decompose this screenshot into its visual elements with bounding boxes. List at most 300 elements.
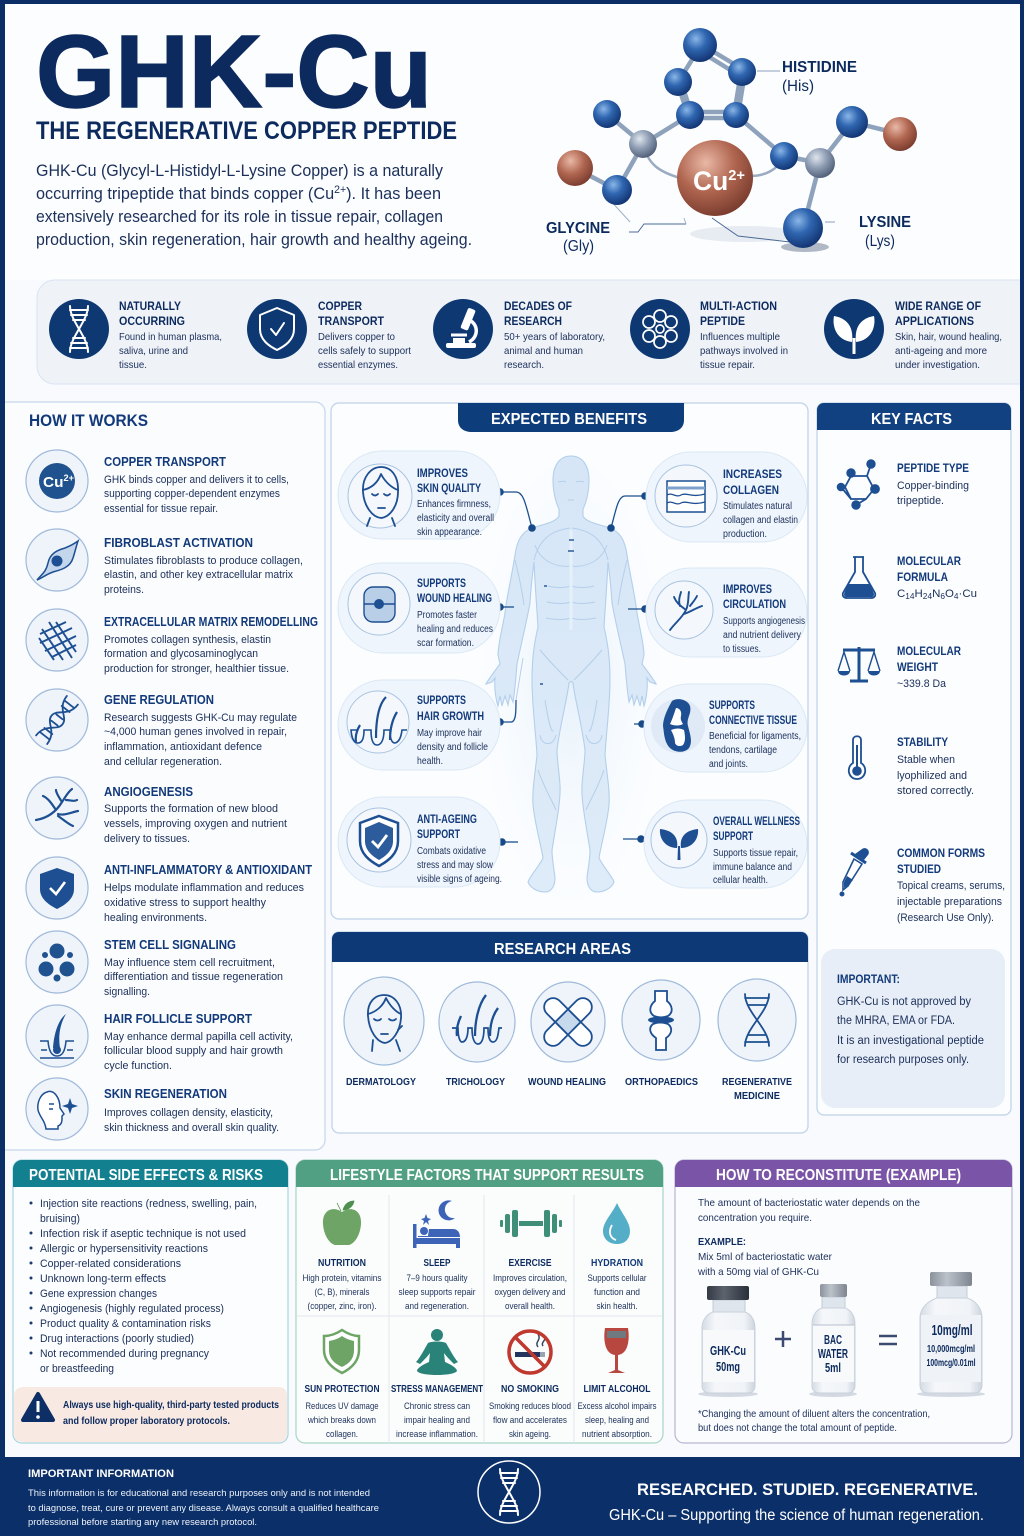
feature: wide range of applications: Skin, hair, wound healing, xyxy=(895,331,1002,343)
list: side effects: Not recommended during pregnancy xyxy=(40,1348,209,1360)
panel: feature band xyxy=(37,280,1024,384)
feature: multi-action peptide: pathways involved in xyxy=(700,345,788,357)
factor: sun protection: SUN PROTECTION xyxy=(304,1383,380,1395)
fact: stability xyxy=(849,735,974,797)
factor: sleep: sleep supports repair xyxy=(398,1287,476,1298)
benefit: improves skin quality: SKIN QUALITY xyxy=(417,483,481,495)
feature: multi-action peptide: tissue repair. xyxy=(700,359,755,371)
item: fibroblast activation: proteins. xyxy=(104,584,144,596)
vial: 10mg/ml result xyxy=(917,1272,985,1397)
item: stem cell signaling xyxy=(26,931,283,998)
area: trichology: TRICHOLOGY xyxy=(446,1076,505,1088)
fact: molecular formula: FORMULA xyxy=(897,570,948,584)
fact: common forms studied: injectable preparations xyxy=(897,896,1002,908)
feature: multi-action peptide xyxy=(630,299,788,371)
factor: stress management xyxy=(391,1329,483,1440)
feature: multi-action peptide: PEPTIDE xyxy=(700,314,745,328)
fact: molecular formula: O xyxy=(945,588,954,600)
factor: nutrition xyxy=(302,1201,382,1312)
feature: wide range of applications: APPLICATIONS xyxy=(895,314,974,328)
benefit: increases collagen: INCREASES xyxy=(723,469,782,481)
factor: no smoking: Smoking reduces blood xyxy=(489,1401,571,1412)
benefit: increases collagen xyxy=(646,452,807,542)
fact: molecular weight: MOLECULAR xyxy=(897,644,961,658)
item: extracellular matrix remodelling xyxy=(26,609,318,675)
feature: naturally occurring: tissue. xyxy=(119,359,147,371)
item: copper transport: COPPER TRANSPORT xyxy=(104,455,226,469)
benefit: supports wound healing: healing and reduces xyxy=(417,624,493,635)
item: angiogenesis xyxy=(26,777,287,845)
factor: nutrition: (C, B), minerals xyxy=(314,1287,370,1298)
footer: tagline xyxy=(609,1480,984,1524)
fact: common forms studied: COMMON FORMS xyxy=(897,846,985,860)
fact: molecular formula: ·Cu xyxy=(959,588,977,600)
benefit: supports hair growth xyxy=(338,680,500,770)
subtitle: THE REGENERATIVE COPPER PEPTIDE xyxy=(36,117,457,145)
item: hair follicle support: cycle function. xyxy=(104,1060,172,1072)
vial: GHK-Cu 50mg xyxy=(698,1286,758,1397)
benefit: supports hair growth: HAIR GROWTH xyxy=(417,711,484,723)
factor: exercise: oxygen delivery and xyxy=(494,1287,566,1298)
item: copper transport: 2+ xyxy=(63,473,74,483)
fact: molecular formula: 6 xyxy=(940,592,946,601)
item: anti-inflammatory and antioxidant: oxidative stress to support healthy xyxy=(104,897,267,909)
item: extracellular matrix remodelling: Promotes collagen synthesis, elastin xyxy=(104,634,271,646)
factor: no smoking: skin ageing. xyxy=(509,1429,551,1440)
benefit: supports wound healing: WOUND HEALING xyxy=(417,593,492,605)
footnote xyxy=(698,1409,930,1434)
instructions: with a 50mg vial of GHK-Cu xyxy=(697,1266,819,1278)
fact: molecular formula: 14 xyxy=(905,592,915,601)
item: extracellular matrix remodelling: EXTRACELLULAR MATRIX REMODELLING xyxy=(104,615,318,629)
feature: decades of research: animal and human xyxy=(504,345,583,357)
footer: important information: to diagnose, treat, cure or prevent any disease. Always consult a qualified healthcare xyxy=(28,1503,379,1514)
item: gene regulation xyxy=(26,689,297,768)
fact: molecular weight xyxy=(838,644,961,690)
item: gene regulation: inflammation, antioxidant defence xyxy=(104,741,262,753)
item: fibroblast activation: Stimulates fibroblasts to produce collagen, xyxy=(104,555,303,567)
factor: stress management: increase inflammation. xyxy=(396,1429,478,1440)
list: side effects: Gene expression changes xyxy=(40,1288,157,1300)
panel: research areas xyxy=(332,932,808,1133)
item: hair follicle support: follicular blood supply and hair growth xyxy=(104,1045,283,1057)
heading tab: expected benefits xyxy=(458,403,684,432)
label: lysine: LYSINE xyxy=(859,214,911,231)
benefit: improves skin quality xyxy=(338,451,500,539)
benefit: improves skin quality: Enhances firmness, xyxy=(417,499,491,510)
item: angiogenesis: vessels, improving oxygen and nutrient xyxy=(104,818,287,830)
label: glycine xyxy=(546,220,610,255)
benefit: increases collagen: Stimulates natural xyxy=(723,501,792,512)
area: regenerative medicine: MEDICINE xyxy=(734,1090,780,1102)
molecule illustration: Cu xyxy=(693,166,729,196)
item: gene regulation: ~4,000 human genes involved in repair, xyxy=(104,726,287,738)
list: side effects: Drug interactions (poorly studied) xyxy=(40,1333,194,1345)
list: side effects xyxy=(30,1198,257,1375)
fact: common forms studied: (Research Use Only). xyxy=(897,912,994,924)
equals sign xyxy=(879,1336,897,1344)
benefit: increases collagen: production. xyxy=(723,529,767,540)
item: copper transport: supporting copper-dependent enzymes xyxy=(104,488,281,500)
factor: no smoking: flow and accelerates xyxy=(493,1415,567,1426)
list: side effects: Allergic or hypersensitivity reactions xyxy=(40,1243,208,1255)
feature: wide range of applications: WIDE RANGE OF xyxy=(895,299,981,313)
panel: potential side effects and risks xyxy=(13,1160,288,1443)
list: side effects: or breastfeeding xyxy=(40,1363,114,1375)
instructions: Mix 5ml of bacteriostatic water xyxy=(698,1251,832,1263)
intro paragraph: production, skin regeneration, hair growth and healthy ageing. xyxy=(36,230,472,249)
factor: stress management: impair healing and xyxy=(404,1415,470,1426)
item: extracellular matrix remodelling: formation and glycosaminoglycan xyxy=(104,648,258,660)
feature: copper transport xyxy=(247,299,411,371)
instructions: concentration you require. xyxy=(698,1212,812,1224)
factor: sleep xyxy=(398,1200,476,1312)
molecule illustration: 2+ xyxy=(728,167,745,184)
vial: 10mg/ml result: 10,000mcg/ml xyxy=(927,1344,975,1355)
factor: hydration xyxy=(588,1203,646,1312)
callout: important: the MHRA, EMA or FDA. xyxy=(837,1015,955,1027)
illustration: human body xyxy=(476,445,666,915)
benefit: supports connective tissue xyxy=(644,684,807,772)
feature: naturally occurring: NATURALLY xyxy=(119,299,181,313)
item: skin regeneration: skin thickness and overall skin quality. xyxy=(104,1122,279,1134)
item: angiogenesis: Supports the formation of new blood xyxy=(104,803,278,815)
feature: decades of research: research. xyxy=(504,359,544,371)
benefit: anti-ageing support: ANTI-AGEING xyxy=(417,814,477,826)
benefit: anti-ageing support: stress and may slow xyxy=(417,860,494,871)
footer: tagline: GHK-Cu – Supporting the science of human regeneration. xyxy=(609,1507,984,1524)
factor: sleep: 7–9 hours quality xyxy=(406,1273,468,1284)
footer: important information xyxy=(28,1468,379,1528)
item: skin regeneration: Improves collagen density, elasticity, xyxy=(104,1107,273,1119)
instructions: The amount of bacteriostatic water depends on the xyxy=(698,1197,920,1209)
feature: multi-action peptide: Influences multiple xyxy=(700,331,780,343)
benefit: supports connective tissue: SUPPORTS xyxy=(709,700,755,712)
factor: exercise: Improves circulation, xyxy=(493,1273,567,1284)
heading: how it works: HOW IT WORKS xyxy=(29,411,148,430)
factor: sun protection: collagen. xyxy=(326,1429,358,1440)
label: lysine xyxy=(825,214,911,250)
intro paragraph: extensively researched for its role in tissue repair, collagen xyxy=(36,207,443,226)
benefit: overall wellness support: immune balance and xyxy=(713,862,792,873)
callout: warning: and follow proper laboratory protocols. xyxy=(63,1415,230,1427)
item: anti-inflammatory and antioxidant: healing environments. xyxy=(104,912,207,924)
feature: copper transport: cells safely to support xyxy=(318,345,411,357)
callout: warning: Always use high-quality, third-party tested products xyxy=(63,1399,279,1411)
item: fibroblast activation: FIBROBLAST ACTIVATION xyxy=(104,536,253,550)
footer: DNA emblem xyxy=(478,1461,540,1523)
item: anti-inflammatory and antioxidant xyxy=(26,857,312,924)
benefit: improves circulation: and nutrient delivery xyxy=(723,630,801,641)
benefit: supports hair growth: health. xyxy=(417,756,443,767)
item: copper transport: Cu xyxy=(43,474,63,491)
factor: limit alcohol: nutrient absorption. xyxy=(582,1429,652,1440)
benefit: improves skin quality: IMPROVES xyxy=(417,468,468,480)
item: hair follicle support: May enhance dermal papilla cell activity, xyxy=(104,1031,293,1043)
benefit: supports connective tissue: Beneficial for ligaments, xyxy=(709,731,801,742)
fact: molecular formula: C xyxy=(897,588,905,600)
fact: peptide type: PEPTIDE TYPE xyxy=(897,461,969,475)
benefit: supports wound healing: scar formation. xyxy=(417,638,474,649)
list: side effects: bruising) xyxy=(40,1213,80,1225)
footnote: but does not change the total amount of peptide. xyxy=(698,1423,897,1434)
vial: BAC water 5ml xyxy=(809,1284,857,1397)
benefit: anti-ageing support: Combats oxidative xyxy=(417,846,486,857)
fact: molecular formula: 4 xyxy=(954,592,959,601)
vial: BAC water 5ml: WATER xyxy=(818,1347,848,1361)
panel: how to reconstitute xyxy=(675,1160,1012,1443)
benefit: overall wellness support: cellular health. xyxy=(713,875,768,886)
instructions xyxy=(697,1197,920,1278)
fact: peptide type: tripeptide. xyxy=(897,495,944,507)
heading: lifestyle factors: LIFESTYLE FACTORS THAT SUPPORT RESULTS xyxy=(330,1167,644,1184)
fact: stability: STABILITY xyxy=(897,735,948,749)
heading: side effects: POTENTIAL SIDE EFFECTS & RISKS xyxy=(29,1167,263,1184)
benefit: supports connective tissue: and joints. xyxy=(709,759,748,770)
benefit: improves circulation: Supports angiogenesis xyxy=(723,616,805,627)
item: hair follicle support: HAIR FOLLICLE SUPPORT xyxy=(104,1012,252,1026)
item: hair follicle support xyxy=(26,1005,293,1072)
footer: important information: professional before starting any new research protocol. xyxy=(28,1517,257,1528)
feature: decades of research: 50+ years of laboratory, xyxy=(504,331,605,343)
fact: peptide type: Copper-binding xyxy=(897,480,969,492)
benefit: improves circulation: to tissues. xyxy=(723,644,761,655)
benefit: supports wound healing: Promotes faster xyxy=(417,610,478,621)
area: trichology xyxy=(439,982,515,1088)
panel: how it works xyxy=(0,402,325,1150)
factor: hydration: Supports cellular xyxy=(588,1273,646,1284)
feature: copper transport: Delivers copper to xyxy=(318,331,395,343)
factor: exercise xyxy=(493,1210,567,1312)
area: dermatology: DERMATOLOGY xyxy=(346,1076,416,1088)
heading: key facts: KEY FACTS xyxy=(871,411,952,428)
panel: key facts xyxy=(817,403,1011,1115)
label: histidine: HISTIDINE xyxy=(782,59,857,76)
area: regenerative medicine: REGENERATIVE xyxy=(722,1076,792,1088)
area: orthopaedics: ORTHOPAEDICS xyxy=(625,1076,698,1088)
intro paragraph: occurring tripeptide that binds copper (Cu xyxy=(36,184,348,203)
footer: important information: IMPORTANT INFORMATION xyxy=(28,1468,174,1480)
area: wound healing xyxy=(528,982,606,1088)
benefit: overall wellness support: Supports tissue repair, xyxy=(713,848,798,859)
item: fibroblast activation xyxy=(26,529,303,596)
factor: hydration: HYDRATION xyxy=(591,1257,643,1269)
benefit: supports hair growth: May improve hair xyxy=(417,728,483,739)
area: dermatology xyxy=(344,977,424,1088)
item: skin regeneration: SKIN REGENERATION xyxy=(104,1087,227,1101)
callout: important: GHK-Cu is not approved by xyxy=(837,996,971,1008)
feature: copper transport: COPPER xyxy=(318,299,362,313)
benefit: supports connective tissue: tendons, cartilage xyxy=(709,745,777,756)
connector lines xyxy=(496,488,649,846)
item: gene regulation: Research suggests GHK-Cu may regulate xyxy=(104,712,297,724)
factor: no smoking: NO SMOKING xyxy=(501,1383,559,1395)
fact: peptide type xyxy=(838,460,969,509)
vial: BAC water 5ml: BAC xyxy=(824,1333,842,1347)
label: histidine: (His) xyxy=(782,78,814,95)
callout: warning xyxy=(14,1387,287,1442)
factor: sleep: SLEEP xyxy=(424,1257,450,1269)
area: wound healing: WOUND HEALING xyxy=(528,1076,606,1088)
list: side effects: Copper-related considerations xyxy=(40,1258,181,1270)
fact: common forms studied: STUDIED xyxy=(897,862,941,876)
benefit: supports wound healing xyxy=(338,563,500,653)
footer xyxy=(0,1457,1024,1536)
benefit: improves circulation: IMPROVES xyxy=(723,584,772,596)
feature: decades of research: DECADES OF xyxy=(504,299,572,313)
factor: limit alcohol: sleep, healing and xyxy=(585,1415,649,1426)
factor: hydration: function and xyxy=(594,1287,640,1298)
feature: naturally occurring: Found in human plasma, xyxy=(119,331,222,343)
list: side effects: Angiogenesis (highly regulated process) xyxy=(40,1303,224,1315)
feature: naturally occurring xyxy=(49,299,222,371)
factor: nutrition: (copper, zinc, iron). xyxy=(308,1301,376,1312)
label: glycine: GLYCINE xyxy=(546,220,610,237)
list: side effects: Unknown long-term effects xyxy=(40,1273,166,1285)
factor: sleep: and regeneration. xyxy=(405,1301,469,1312)
item: angiogenesis: delivery to tissues. xyxy=(104,833,190,845)
feature: wide range of applications: anti-ageing and more xyxy=(895,345,987,357)
intro paragraph: ). It has been xyxy=(346,184,441,203)
benefit: improves skin quality: elasticity and overall xyxy=(417,513,494,524)
item: stem cell signaling: differentiation and tissue regeneration xyxy=(104,971,283,983)
intro paragraph: 2+ xyxy=(334,184,346,196)
feature: copper transport: essential enzymes. xyxy=(318,359,398,371)
factor: sun protection xyxy=(304,1330,380,1440)
vial: GHK-Cu 50mg: GHK-Cu xyxy=(710,1343,746,1358)
item: gene regulation: GENE REGULATION xyxy=(104,693,214,707)
item: anti-inflammatory and antioxidant: ANTI-INFLAMMATORY & ANTIOXIDANT xyxy=(104,863,312,877)
fact: stability: lyophilized and xyxy=(897,770,967,782)
list: side effects: Injection site reactions (redness, swelling, pain, xyxy=(40,1198,257,1210)
heading: reconstitute: HOW TO RECONSTITUTE (EXAMPLE) xyxy=(716,1167,961,1184)
area: orthopaedics xyxy=(622,980,700,1088)
feature: wide range of applications xyxy=(824,299,1002,371)
item: stem cell signaling: May influence stem cell recruitment, xyxy=(104,957,275,969)
list: side effects: Infection risk if aseptic technique is not used xyxy=(40,1228,246,1240)
factor: sun protection: which breaks down xyxy=(307,1415,376,1426)
item: copper transport: GHK binds copper and delivers it to cells, xyxy=(104,474,289,486)
fact: molecular formula: N xyxy=(932,588,940,600)
area: regenerative medicine xyxy=(718,979,796,1102)
fact: molecular formula xyxy=(843,554,977,601)
vial: GHK-Cu 50mg: 50mg xyxy=(716,1359,740,1374)
vial: 10mg/ml result: 10mg/ml xyxy=(932,1322,972,1339)
factor: stress management: STRESS MANAGEMENT xyxy=(391,1383,483,1395)
feature: decades of research xyxy=(433,299,605,371)
benefit: improves circulation: CIRCULATION xyxy=(723,599,786,611)
footnote: *Changing the amount of diluent alters the concentration, xyxy=(698,1409,930,1420)
footer: important information: This information is for educational and research purposes only and is not intended xyxy=(28,1488,370,1499)
panel: lifestyle factors xyxy=(296,1160,663,1443)
factor: exercise: EXERCISE xyxy=(508,1257,552,1269)
vial: BAC water 5ml: 5ml xyxy=(825,1361,841,1375)
benefit: supports hair growth: SUPPORTS xyxy=(417,695,466,707)
benefit: improves skin quality: skin appearance. xyxy=(417,527,482,538)
title: GHK-Cu xyxy=(36,14,432,129)
item: gene regulation: and cellular regeneration. xyxy=(104,756,222,768)
factor: limit alcohol: Excess alcohol impairs xyxy=(578,1401,657,1412)
feature: naturally occurring: OCCURRING xyxy=(119,314,185,328)
fact: molecular formula: 24 xyxy=(923,592,933,601)
plus sign xyxy=(775,1331,791,1347)
factor: nutrition: High protein, vitamins xyxy=(302,1273,382,1284)
callout: important: IMPORTANT: xyxy=(837,972,900,986)
fact: stability: Stable when xyxy=(897,754,955,766)
footer: tagline: RESEARCHED. STUDIED. REGENERATIVE. xyxy=(637,1480,978,1499)
fact: common forms studied: Topical creams, serums, xyxy=(897,880,1005,892)
benefit: anti-ageing support: visible signs of ageing. xyxy=(417,874,502,885)
fact: stability: stored correctly. xyxy=(897,785,974,797)
benefit: anti-ageing support xyxy=(338,797,502,887)
heading: research areas: RESEARCH AREAS xyxy=(494,941,631,958)
label: histidine xyxy=(757,59,857,95)
item: extracellular matrix remodelling: production for stronger, healthier tissue. xyxy=(104,663,289,675)
benefit: supports hair growth: density and follicle xyxy=(417,742,488,753)
feature: wide range of applications: under investigation. xyxy=(895,359,980,371)
item: copper transport: essential for tissue repair. xyxy=(104,503,218,515)
callout: important xyxy=(821,949,1005,1108)
molecule illustration xyxy=(557,28,917,252)
item: stem cell signaling: signalling. xyxy=(104,986,150,998)
callout: important: It is an investigational peptide xyxy=(837,1035,984,1047)
list: side effects: Product quality & contamination risks xyxy=(40,1318,211,1330)
factor: nutrition: NUTRITION xyxy=(318,1257,366,1269)
benefit: increases collagen: collagen and elastin xyxy=(723,515,798,526)
label: lysine: (Lys) xyxy=(865,233,895,250)
benefit: increases collagen: COLLAGEN xyxy=(723,485,779,497)
factor: hydration: skin health. xyxy=(596,1301,638,1312)
item: stem cell signaling: STEM CELL SIGNALING xyxy=(104,938,236,952)
vial: 10mg/ml result: 100mcg/0.01ml xyxy=(926,1358,976,1369)
item: anti-inflammatory and antioxidant: Helps modulate inflammation and reduces xyxy=(104,882,305,894)
callout: important: for research purposes only. xyxy=(837,1054,969,1066)
intro paragraph: GHK-Cu (Glycyl-L-Histidyl-L-Lysine Copper) is a naturally xyxy=(36,161,443,180)
benefit: improves circulation xyxy=(646,568,807,657)
feature: naturally occurring: saliva, urine and xyxy=(119,345,188,357)
item: fibroblast activation: elastin, and other key extracellular matrix xyxy=(104,569,294,581)
benefit: anti-ageing support: SUPPORT xyxy=(417,829,460,841)
factor: stress management: Chronic stress can xyxy=(404,1401,470,1412)
label: glycine: (Gly) xyxy=(563,238,594,255)
feature: multi-action peptide: MULTI-ACTION xyxy=(700,299,777,313)
intro paragraph xyxy=(36,161,472,249)
factor: limit alcohol: LIMIT ALCOHOL xyxy=(584,1383,651,1395)
item: angiogenesis: ANGIOGENESIS xyxy=(104,785,193,799)
fact: molecular weight: ~339.8 Da xyxy=(897,678,947,690)
benefit: supports wound healing: SUPPORTS xyxy=(417,578,466,590)
factor: limit alcohol xyxy=(578,1328,657,1440)
item: skin regeneration xyxy=(26,1078,279,1140)
factor: sun protection: Reduces UV damage xyxy=(306,1401,378,1412)
fact: molecular weight: WEIGHT xyxy=(897,660,939,674)
benefit: overall wellness support xyxy=(644,800,807,888)
benefit: overall wellness support: SUPPORT xyxy=(713,831,753,843)
benefit: overall wellness support: OVERALL WELLNESS xyxy=(713,816,800,828)
fact: molecular formula: H xyxy=(915,588,923,600)
panel: expected benefits xyxy=(331,403,808,919)
heading tab: expected benefits: EXPECTED BENEFITS xyxy=(491,411,647,428)
fact: common forms studied xyxy=(840,846,1005,924)
instructions: EXAMPLE: xyxy=(698,1236,746,1248)
feature: copper transport: TRANSPORT xyxy=(318,314,385,328)
fact: molecular formula: MOLECULAR xyxy=(897,554,961,568)
item: copper transport xyxy=(26,450,289,515)
feature: decades of research: RESEARCH xyxy=(504,314,562,328)
factor: exercise: overall health. xyxy=(505,1301,555,1312)
factor: no smoking xyxy=(489,1331,571,1440)
benefit: supports connective tissue: CONNECTIVE TISSUE xyxy=(709,715,797,727)
